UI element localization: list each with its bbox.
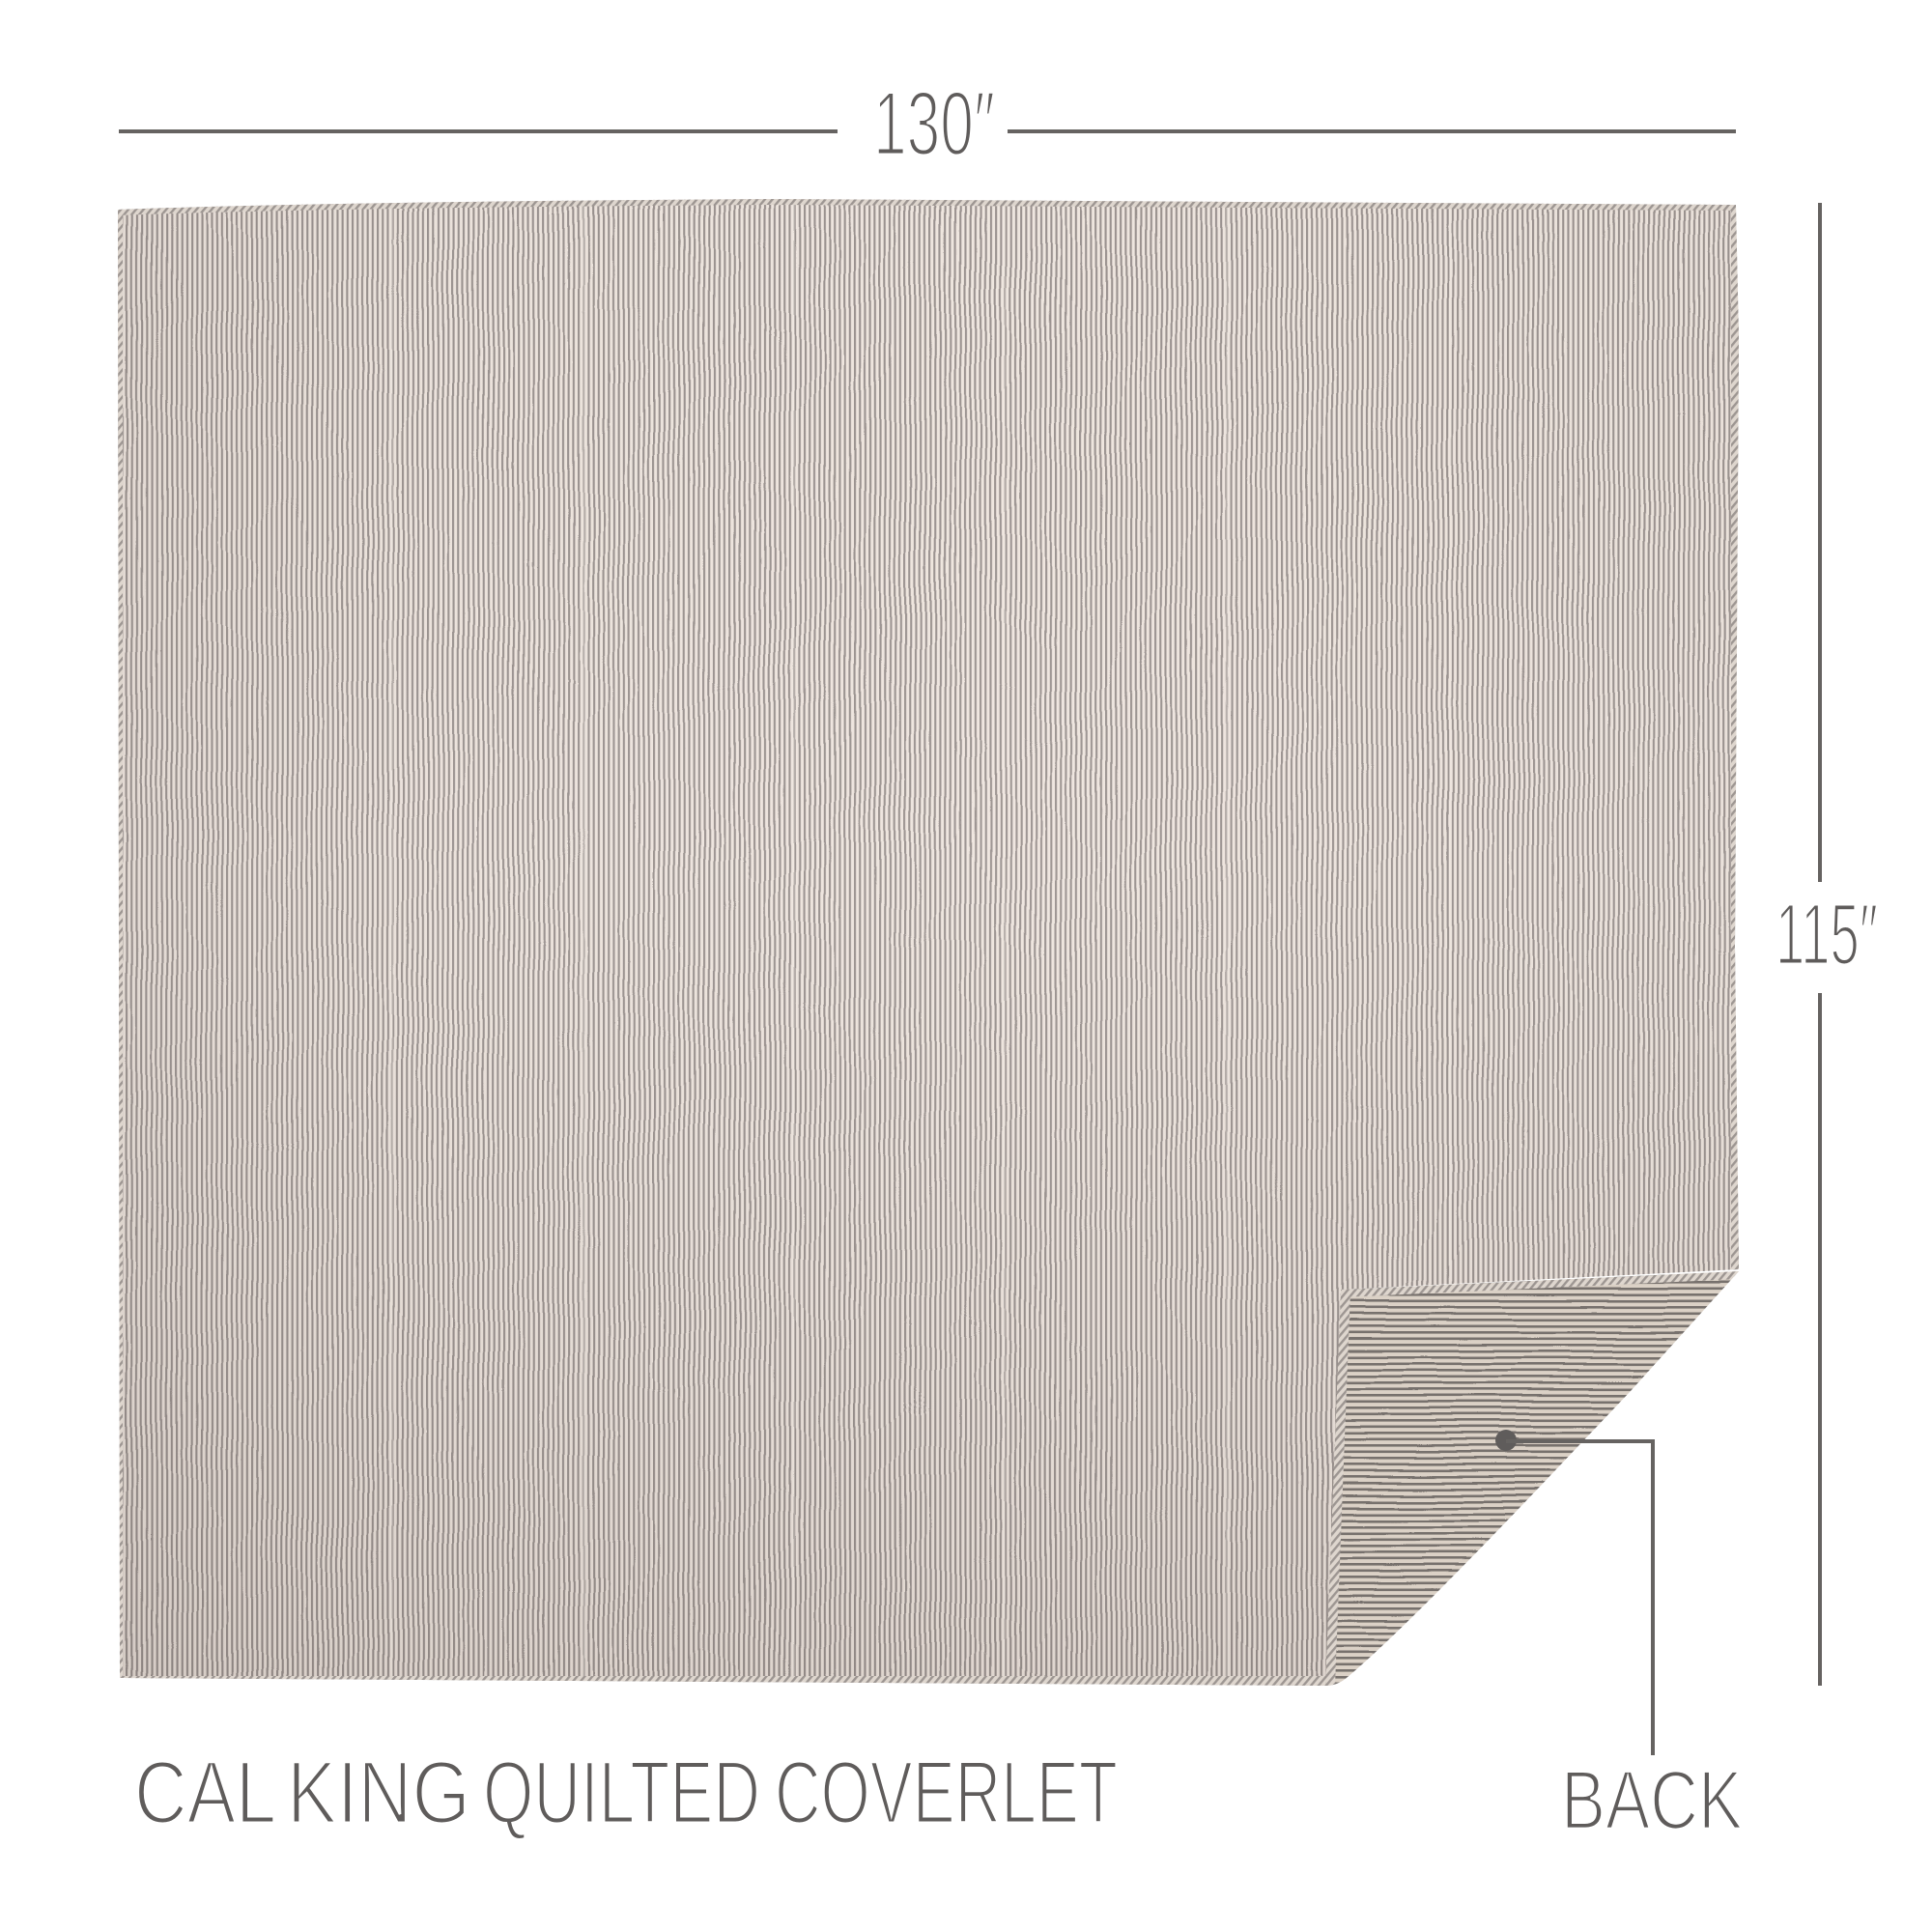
fold: coverlet back corner bbox=[1314, 1261, 1748, 1695]
product title: KING bbox=[287, 1744, 470, 1842]
back label: BACK bbox=[1561, 1754, 1743, 1847]
width label: 130″ bbox=[873, 72, 995, 174]
product title: QUILTED bbox=[483, 1744, 760, 1842]
product title: CAL bbox=[134, 1744, 276, 1842]
coverlet front panel bbox=[97, 184, 1758, 1710]
height dimension line bbox=[1818, 203, 1822, 1686]
product title bbox=[134, 1744, 1118, 1842]
product title: COVERLET bbox=[775, 1744, 1118, 1842]
top dimension line bbox=[119, 129, 1736, 133]
callout: back leader line and dot bbox=[1495, 1430, 1653, 1755]
